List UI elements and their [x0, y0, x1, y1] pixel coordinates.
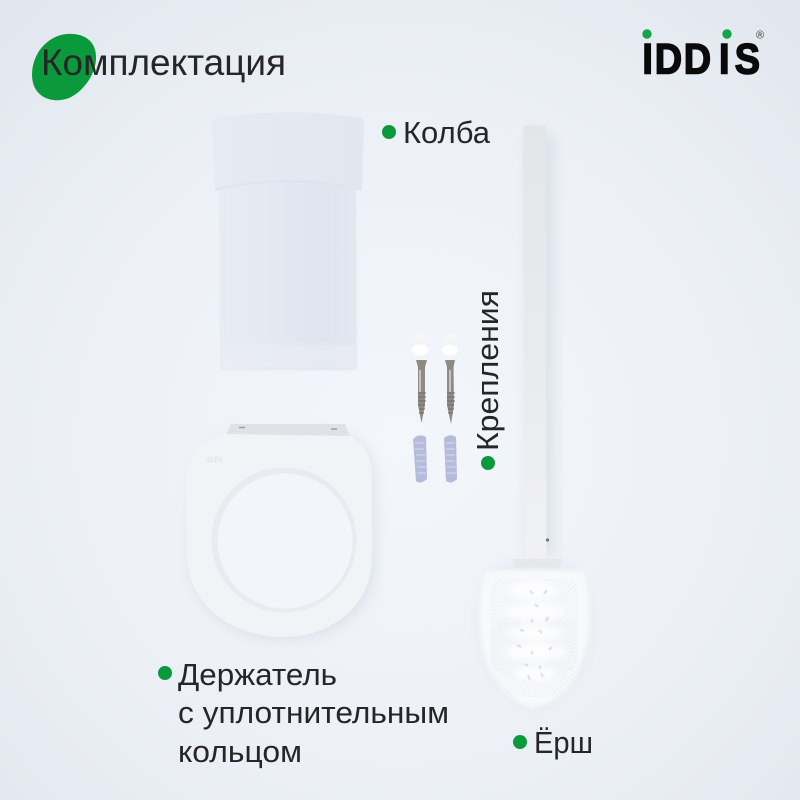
logo: IDDIS: ®	[756, 30, 764, 42]
label: Держатель с уплотнительным кольцом: Держатель	[178, 657, 337, 692]
handle	[523, 125, 546, 560]
mounting screws and dowels	[412, 334, 458, 483]
caps	[413, 334, 427, 342]
screws	[416, 360, 427, 423]
label: Держатель с уплотнительным кольцом: с уплотнительным	[178, 695, 449, 730]
wall holder with ring	[187, 424, 375, 640]
label: Колба: Колба	[403, 115, 491, 150]
dowels	[413, 435, 427, 483]
collar	[513, 559, 562, 572]
plate	[187, 434, 372, 637]
bristle texture	[498, 589, 570, 687]
logo: IDDIS: IDDIS	[642, 34, 760, 83]
glass flask	[212, 112, 364, 370]
ring	[212, 468, 356, 612]
toilet brush	[479, 120, 590, 708]
label: Ёрш: Ёрш	[534, 725, 593, 760]
bristles	[480, 565, 589, 708]
bracket	[225, 424, 350, 437]
label: Крепления: Крепления	[470, 290, 505, 451]
label: Держатель с уплотнительным кольцом: кольцом	[178, 734, 302, 769]
title: Комплектация	[41, 42, 286, 83]
label: Держатель с уплотнительным кольцом	[158, 657, 449, 769]
embossed logo: iddis	[206, 455, 222, 464]
green blob behind title	[32, 34, 96, 100]
